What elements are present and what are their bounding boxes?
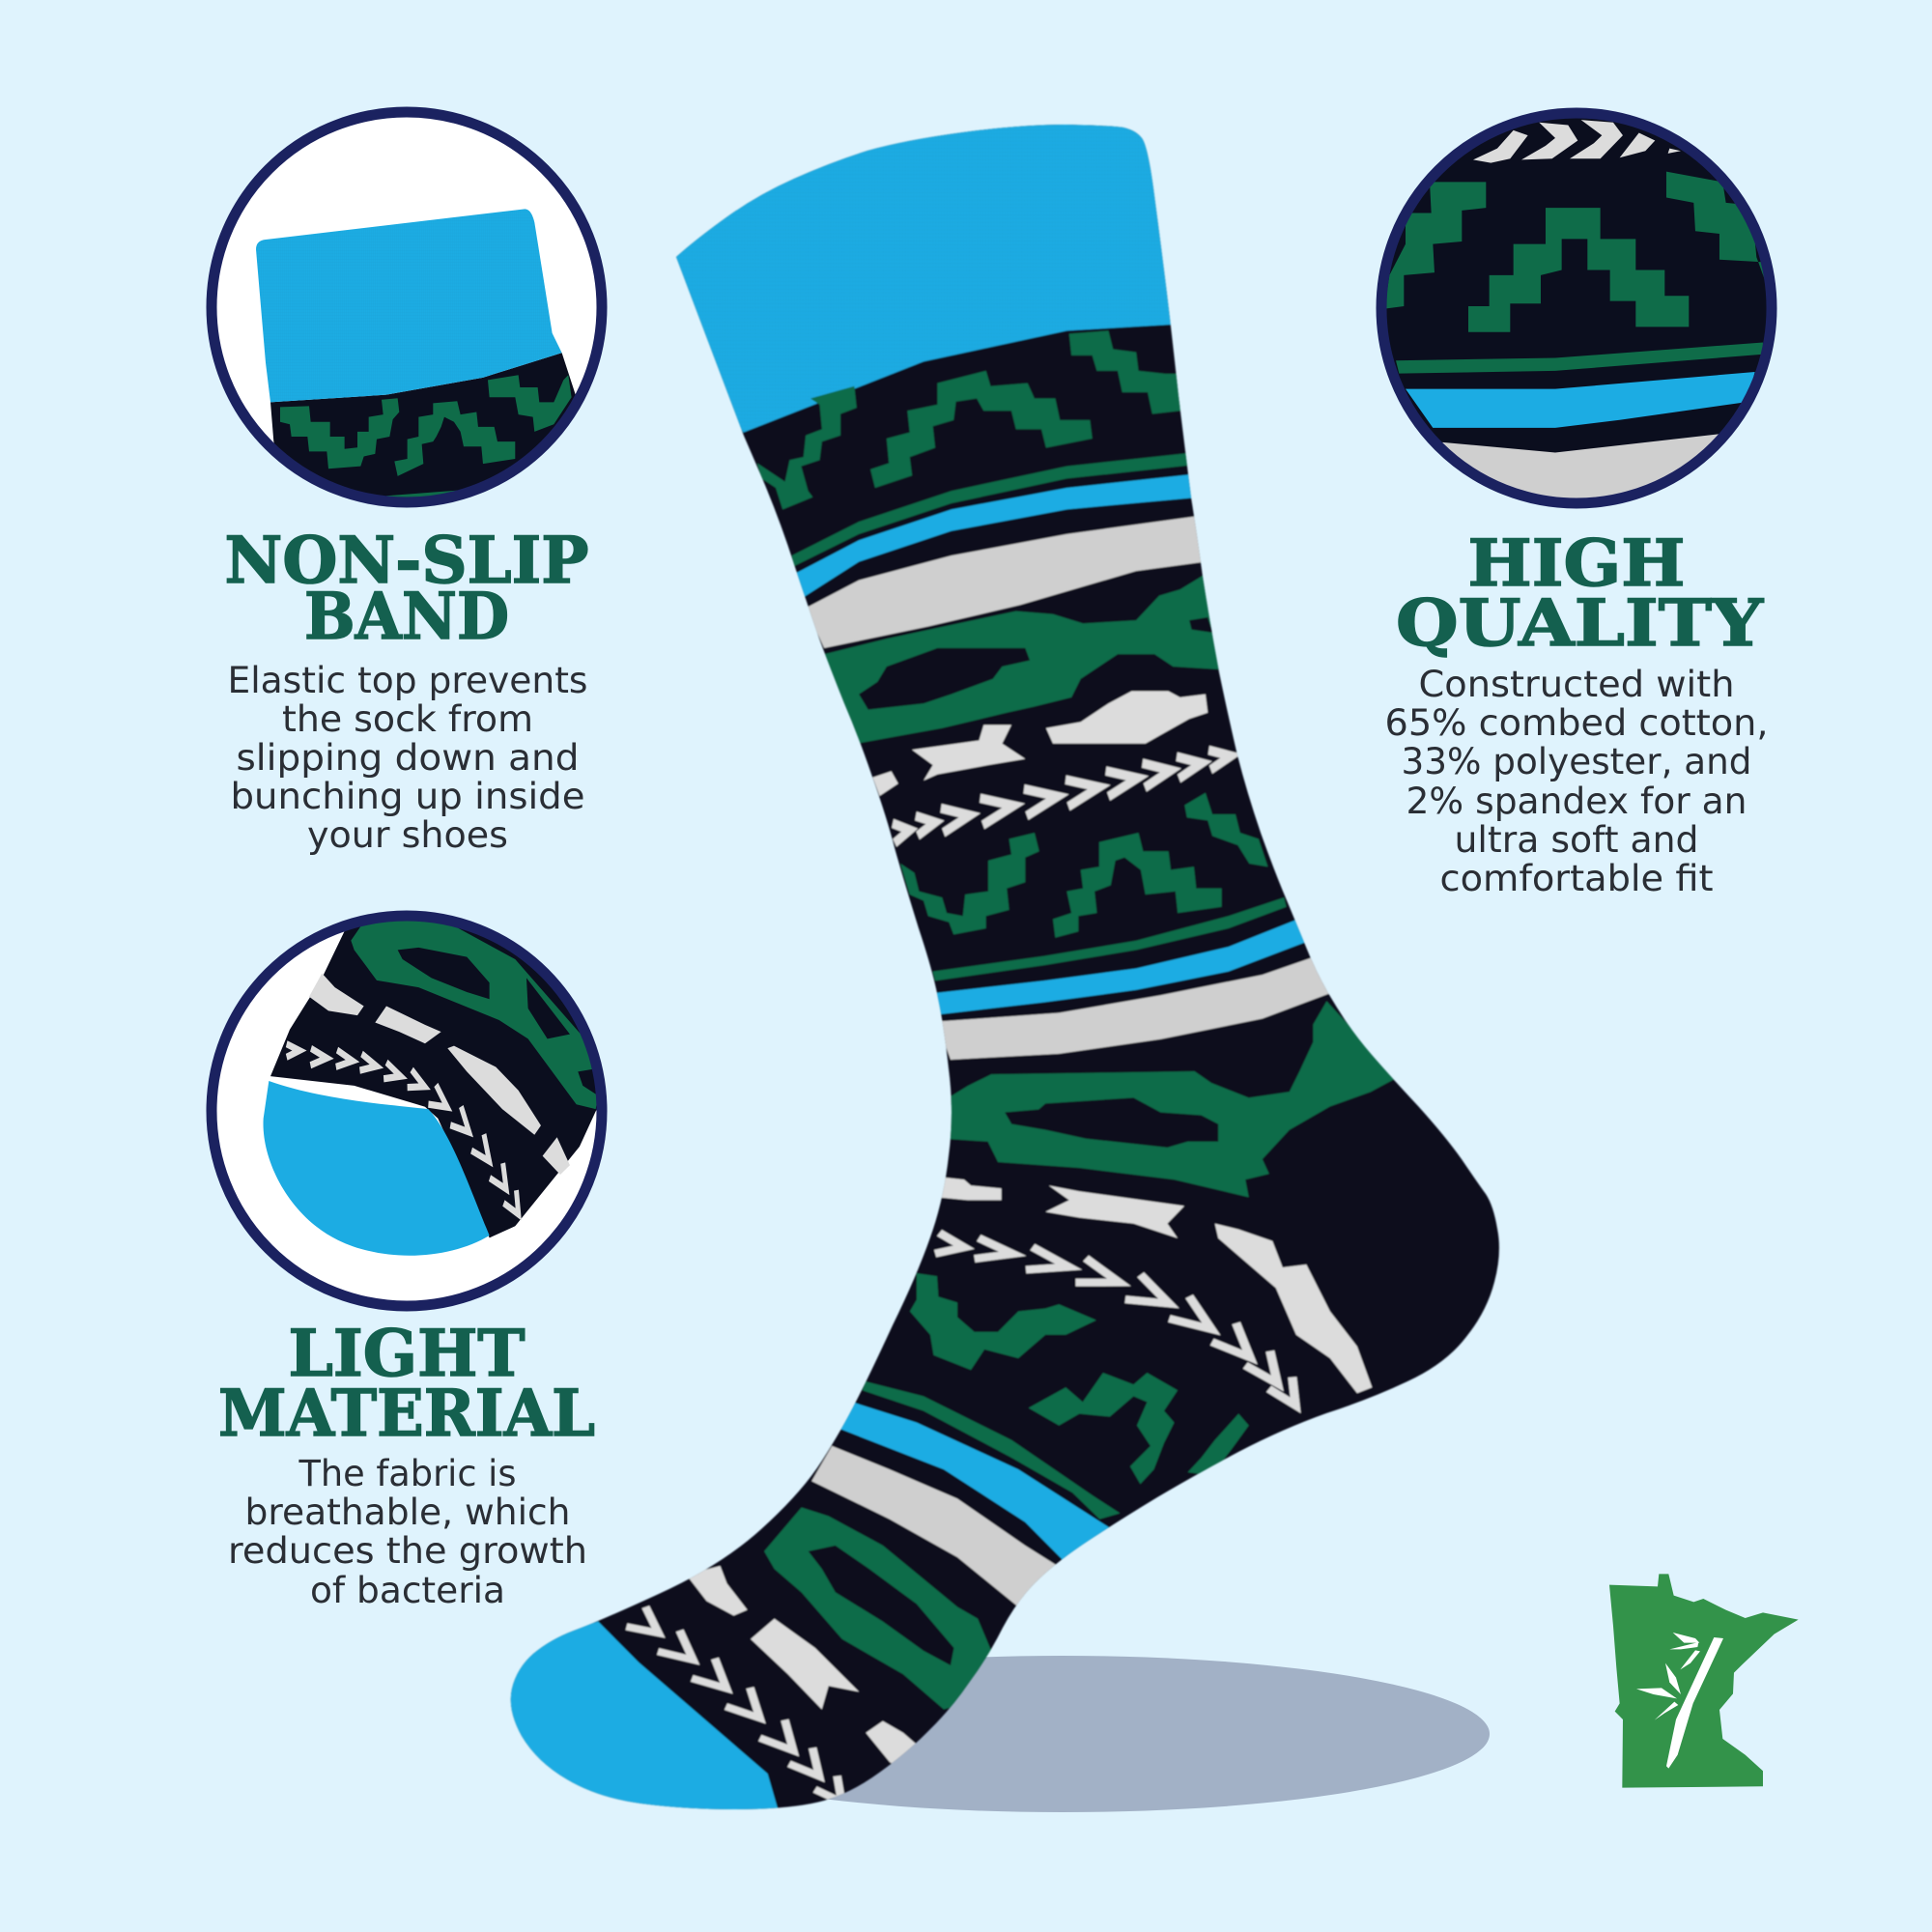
foot white bow	[751, 1619, 859, 1709]
lower zigzag V	[900, 833, 1039, 934]
fabric zigzag peak	[1468, 208, 1689, 332]
green diamond band	[824, 574, 1222, 744]
text: non-slip band description: slipping down and	[236, 737, 580, 779]
detail circle: light material	[212, 908, 611, 1306]
heading: non-slip band: BAND	[304, 579, 509, 654]
band black section	[270, 353, 577, 505]
toe blue	[263, 1081, 490, 1256]
toe green band	[351, 917, 606, 1109]
text: high quality description	[1385, 664, 1768, 899]
text: light material description: The fabric is	[298, 1453, 516, 1494]
text: non-slip band description: your shoes	[307, 814, 508, 856]
sock cuff	[675, 124, 1172, 434]
band blue top	[256, 209, 562, 402]
text: light material description: reduces the growth	[228, 1530, 587, 1572]
toe black region	[270, 908, 611, 1237]
upper zigzag left	[757, 386, 857, 509]
toe black notch	[526, 978, 570, 1038]
foot grey band	[811, 1446, 1063, 1606]
foot chevrons	[627, 1607, 853, 1808]
instep zigzag	[1029, 1373, 1178, 1484]
toe white small mark	[543, 1137, 570, 1175]
foot white mark	[686, 1566, 748, 1616]
blue stripe	[794, 473, 1201, 599]
toe black notch lower	[578, 1069, 597, 1095]
foot black oval	[809, 1546, 954, 1665]
white bow shape	[912, 725, 1025, 781]
ankle chevrons	[935, 1233, 1307, 1411]
text: non-slip band description: Elastic top prevents	[228, 660, 587, 701]
ankle white arrow	[937, 1177, 1002, 1200]
bamboo stem	[1666, 1637, 1723, 1769]
text: light material description: breathable, which	[245, 1492, 570, 1533]
green stripe	[792, 453, 1192, 566]
small white mark	[872, 771, 898, 796]
sock shadow	[636, 1656, 1490, 1812]
fabric green stripe	[1396, 342, 1763, 374]
foot blue stripe	[838, 1402, 1110, 1563]
heading: high quality: QUALITY	[1396, 585, 1764, 661]
fabric blue stripe	[1406, 372, 1755, 428]
lower zigzag right	[1184, 793, 1267, 867]
heading: non-slip band	[224, 523, 589, 654]
chevron row	[893, 746, 1232, 843]
toe white diamond	[447, 1046, 541, 1135]
text: high quality description: ultra soft and	[1455, 819, 1698, 861]
band green stripe	[386, 489, 483, 511]
toe white arrow	[309, 974, 364, 1015]
band zigzag V	[280, 398, 399, 469]
toe chevrons	[287, 1044, 525, 1221]
fabric grey band	[1442, 434, 1719, 511]
heading: light material	[218, 1316, 595, 1451]
fabric zigzag right	[1666, 172, 1768, 288]
bamboo leaves	[1636, 1633, 1700, 1720]
text: non-slip band description: the sock from	[282, 698, 533, 740]
band zigzag right	[488, 375, 572, 432]
text: non-slip band description: bunching up inside	[230, 776, 585, 817]
text: non-slip band description	[228, 660, 587, 856]
foot green oval	[764, 1507, 991, 1709]
heading: high quality: HIGH	[1468, 526, 1685, 601]
logo: Minnesota with bamboo	[1609, 1574, 1799, 1788]
heel white stripe	[1215, 1224, 1372, 1393]
toe white bow	[375, 1006, 441, 1043]
white diamond	[1046, 691, 1208, 744]
ankle white bow	[1045, 1185, 1184, 1238]
detail circle: non-slip band	[212, 112, 602, 511]
heading: light material: LIGHT	[288, 1316, 526, 1391]
band zigzag peak	[394, 401, 515, 476]
detail circle: high quality	[1381, 113, 1772, 511]
fabric zigzag left	[1384, 182, 1486, 309]
black oval	[859, 648, 1030, 710]
text: light material description	[228, 1453, 587, 1611]
ankle green band	[944, 1001, 1398, 1197]
text: high quality description: 33% polyester, and	[1401, 741, 1752, 782]
foot lower white mark	[866, 1721, 930, 1771]
sock toe	[483, 1622, 781, 1821]
text: high quality description: 2% spandex for an	[1406, 781, 1747, 822]
heading: high quality	[1396, 526, 1764, 661]
grey band	[806, 516, 1206, 648]
heading: light material: MATERIAL	[218, 1376, 595, 1451]
second blue stripe	[935, 919, 1309, 1014]
text: light material description: of bacteria	[310, 1570, 505, 1611]
text: high quality description: 65% combed cotton,	[1385, 702, 1768, 744]
toe black oval	[398, 948, 490, 999]
upper zigzag peak	[870, 371, 1093, 488]
ankle black oval	[1005, 1097, 1218, 1148]
text: high quality description: Constructed with	[1418, 664, 1735, 705]
instep small zigzag	[1188, 1414, 1249, 1475]
state shape	[1609, 1574, 1799, 1788]
heading: non-slip band: NON-SLIP	[224, 523, 589, 598]
second green stripe	[933, 897, 1287, 980]
black notch	[1189, 617, 1212, 633]
upper zigzag right	[1069, 330, 1180, 413]
lower zigzag peak	[1053, 833, 1222, 938]
text: high quality description: comfortable fit	[1439, 858, 1714, 899]
foot green stripe	[863, 1381, 1120, 1520]
ankle zigzag	[910, 1273, 1096, 1370]
sock illustration	[510, 124, 1500, 1810]
second grey band	[937, 957, 1340, 1060]
fabric chevrons	[1473, 120, 1681, 163]
